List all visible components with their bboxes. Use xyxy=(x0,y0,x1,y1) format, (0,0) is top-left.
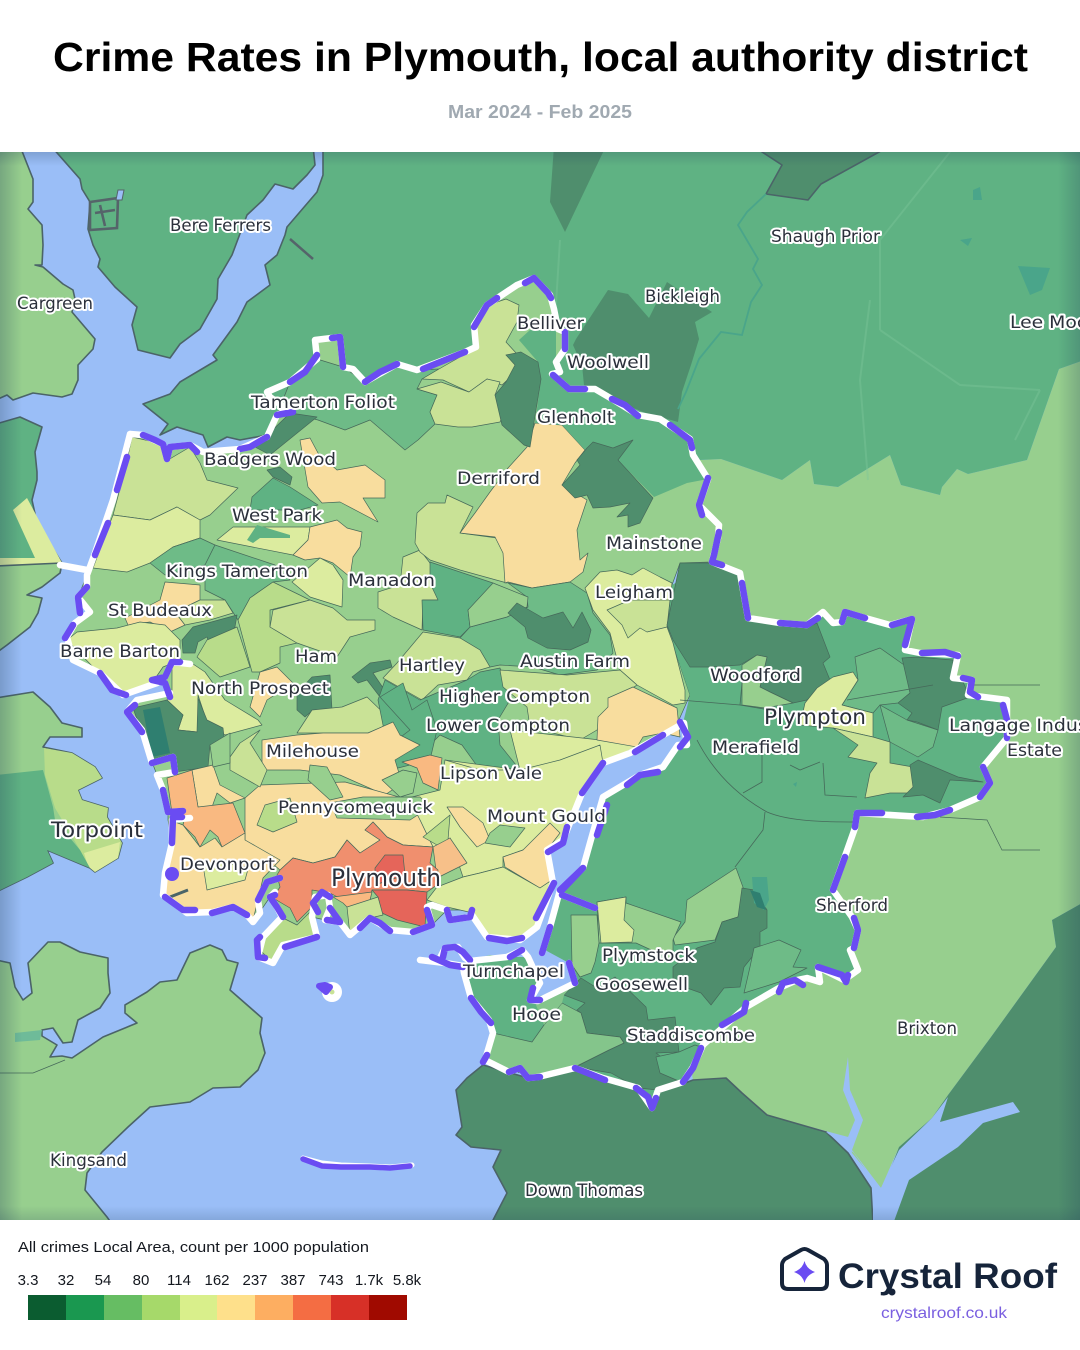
label: Hartley: Hartley xyxy=(399,656,465,676)
label: Lipson Vale: Lipson Vale xyxy=(440,764,542,784)
logo: Crystal Roof xyxy=(782,1249,1057,1322)
blob of boundary at Devonport xyxy=(165,867,179,881)
district boundary: white casing xyxy=(60,278,1007,1108)
place labels xyxy=(17,216,1080,1201)
label: Mount Gould: Mount Gould xyxy=(487,807,606,827)
label: Kingsand: Kingsand xyxy=(50,1151,127,1171)
label: Shaugh Prior: Shaugh Prior xyxy=(771,227,880,247)
label: West Park: West Park xyxy=(232,506,322,526)
legend scale xyxy=(18,1272,422,1320)
legend values xyxy=(18,1272,422,1289)
wards: south city, high-crime centre xyxy=(163,722,603,963)
label: Belliver: Belliver xyxy=(517,314,584,334)
label: Tamerton Foliot: Tamerton Foliot xyxy=(250,393,395,413)
district base: Plympton and Plymstock east of the Plym xyxy=(464,562,1007,1108)
legend values: 80 xyxy=(133,1272,149,1289)
wards: Plymstock and Staddiscombe xyxy=(485,868,807,1090)
label: Ham: Ham xyxy=(295,647,337,667)
label: Plymouth: Plymouth xyxy=(331,864,441,892)
label: Goosewell: Goosewell xyxy=(595,975,688,995)
legend values: 5.8k xyxy=(393,1272,422,1289)
label: North Prospect: North Prospect xyxy=(191,679,329,699)
label: Down Thomas: Down Thomas xyxy=(525,1181,643,1201)
label: Langage Industrial Estate: Estate xyxy=(1007,741,1062,761)
legend values: 237 xyxy=(242,1272,268,1289)
label: Staddiscombe: Staddiscombe xyxy=(627,1026,755,1046)
label: St Budeaux: St Budeaux xyxy=(108,601,212,621)
label: Merafield: Merafield xyxy=(712,738,799,758)
label: Kings Tamerton: Kings Tamerton xyxy=(166,562,308,582)
label: Badgers Wood: Badgers Wood xyxy=(204,450,336,470)
label: Bickleigh: Bickleigh xyxy=(645,287,720,307)
district base: city west of the Plym xyxy=(67,278,719,963)
choropleth map xyxy=(0,146,1080,1224)
wards: centre and Derriford xyxy=(378,298,704,770)
label: Pennycomequick: Pennycomequick xyxy=(278,798,433,818)
legend values: 32 xyxy=(58,1272,74,1289)
label: Derriford: Derriford xyxy=(457,469,540,489)
label: Higher Compton: Higher Compton xyxy=(439,687,590,707)
legend values: 3.3 xyxy=(18,1272,38,1289)
label: Milehouse: Milehouse xyxy=(266,742,359,762)
water xyxy=(0,152,1080,1220)
wards: Plympton xyxy=(667,563,983,867)
district boundary: purple dashes xyxy=(65,278,1007,1108)
icon: house with star xyxy=(782,1249,827,1289)
surrounding land xyxy=(0,146,1080,1224)
label: Barne Barton: Barne Barton xyxy=(60,642,180,662)
label: Woolwell: Woolwell xyxy=(567,353,649,373)
subtitle: date range: Mar 2024 - Feb 2025 xyxy=(448,102,632,122)
label: Torpoint: Torpoint xyxy=(50,818,143,842)
label: Langage Industrial Estate xyxy=(949,716,1080,761)
label: Glenholt: Glenholt xyxy=(537,408,614,428)
label: Brixton: Brixton xyxy=(897,1019,957,1039)
legend values: 743 xyxy=(318,1272,344,1289)
map edge shading xyxy=(0,152,1080,1220)
legend colour swatches xyxy=(28,1295,407,1320)
label: Bere Ferrers: Bere Ferrers xyxy=(170,216,271,236)
wordmark: Crystal Roof xyxy=(838,1257,1057,1296)
title: Crime Rates in Plymouth, local authority district xyxy=(53,34,1028,80)
legend values: 1.7k xyxy=(355,1272,384,1289)
label: Lower Compton: Lower Compton xyxy=(426,716,570,736)
label: Leigham: Leigham xyxy=(595,583,673,603)
legend values: 162 xyxy=(204,1272,230,1289)
legend title: All crimes Local Area, count per 1000 population xyxy=(18,1239,369,1256)
Drake's Island xyxy=(319,982,342,1002)
label: Woodford: Woodford xyxy=(710,666,801,686)
label: Cargreen: Cargreen xyxy=(17,294,93,314)
label: Turnchapel: Turnchapel xyxy=(462,962,564,982)
label: Hooe: Hooe xyxy=(512,1005,561,1025)
legend values: 387 xyxy=(280,1272,306,1289)
label: Manadon: Manadon xyxy=(348,571,435,591)
label: Plympton: Plympton xyxy=(764,705,866,729)
label: Austin Farm: Austin Farm xyxy=(520,652,630,672)
label: Mainstone: Mainstone xyxy=(606,534,702,554)
label: Devonport: Devonport xyxy=(180,855,275,875)
legend values: 114 xyxy=(167,1272,191,1289)
label: Plymstock: Plymstock xyxy=(602,946,695,966)
website: crystalroof.co.uk xyxy=(881,1305,1008,1322)
wards: north and west xyxy=(67,359,440,772)
label: Sherford: Sherford xyxy=(816,896,888,916)
legend values: 54 xyxy=(95,1272,111,1289)
breakwater xyxy=(303,1158,412,1168)
